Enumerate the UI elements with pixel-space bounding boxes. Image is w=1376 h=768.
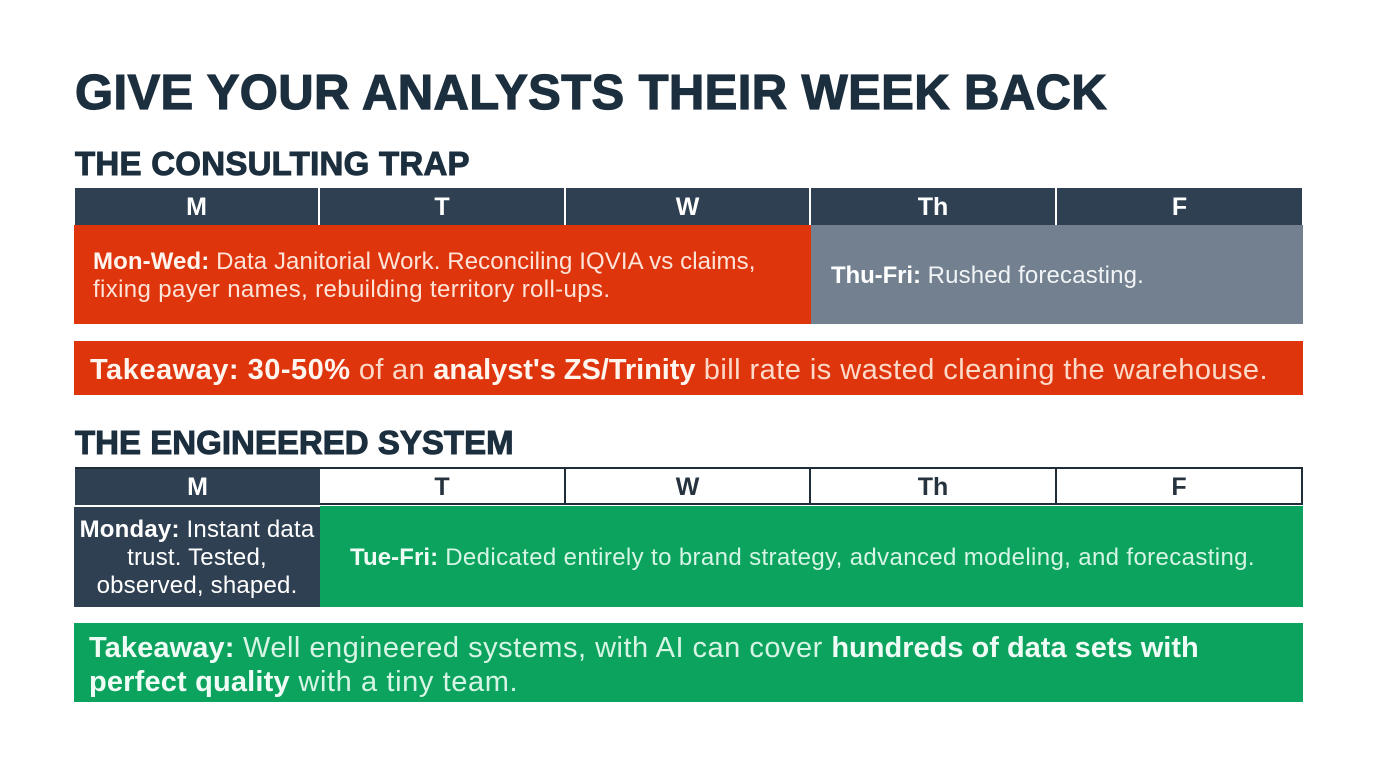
day: Monday active bbox=[75, 469, 320, 505]
text: Tue-Fri: Tue-Fri: Dedicated entirely to brand strategy, advanced modeling, and forecasting. bbox=[350, 544, 1255, 571]
day: Wednesday: W bbox=[676, 193, 699, 221]
day: Thursday bbox=[811, 188, 1057, 225]
panel: Monday instant data trust: trust. Tested, bbox=[127, 544, 267, 571]
day: Friday: F bbox=[1172, 193, 1187, 221]
panel: Thu-Fri rushed forecasting bbox=[811, 225, 1303, 324]
heading: the engineered system: THE ENGINEERED SYSTEM bbox=[75, 424, 514, 461]
day: Friday: F bbox=[1171, 473, 1187, 501]
panel: Tue-Fri dedicated bbox=[320, 506, 1303, 607]
panel: Mon-Wed data janitorial work bbox=[74, 225, 811, 324]
day header row: consulting trap bbox=[75, 188, 1302, 225]
day: Wednesday: W bbox=[676, 473, 699, 501]
panel: Monday instant data trust: observed, shaped. bbox=[97, 572, 297, 599]
panel: Monday instant data trust bbox=[74, 507, 320, 607]
text: engineered takeaway line 2: perfect quality with a tiny team. bbox=[89, 666, 518, 698]
day: Monday: M bbox=[186, 193, 207, 221]
text: Mon-Wed line 2: fixing payer names, rebuilding territory roll-ups. bbox=[93, 276, 610, 303]
text: Thu-Fri: Thu-Fri: Rushed forecasting. bbox=[831, 262, 1144, 289]
day: Wednesday bbox=[566, 469, 811, 505]
text: Mon-Wed line 1: Mon-Wed: Data Janitorial Work. Reconciling IQVIA vs claims, bbox=[93, 248, 756, 275]
day: Monday active: M bbox=[187, 473, 208, 501]
day: Thursday: Th bbox=[918, 193, 948, 221]
day: Tuesday bbox=[320, 469, 566, 505]
day header row: engineered system bbox=[75, 467, 1303, 505]
day: Thursday: Th bbox=[918, 473, 948, 501]
panel: Monday instant data trust: Monday: Instant data bbox=[80, 516, 314, 543]
day: Tuesday bbox=[320, 188, 566, 225]
heading: the consulting trap: THE CONSULTING TRAP bbox=[75, 145, 470, 182]
day: Wednesday bbox=[566, 188, 811, 225]
day: Tuesday: T bbox=[434, 193, 450, 221]
callout: engineered takeaway bbox=[74, 623, 1303, 702]
text: engineered takeaway line 1: Takeaway: Well engineered systems, with AI can cover hundreds of data sets with bbox=[89, 632, 1199, 664]
callout: consulting takeaway bbox=[74, 341, 1303, 395]
text: consulting takeaway: Takeaway: 30-50% of an analyst's ZS/Trinity bill rate is wasted cleaning the warehouse. bbox=[90, 354, 1268, 386]
day: Tuesday: T bbox=[434, 473, 450, 501]
day: Monday bbox=[75, 188, 320, 225]
day: Thursday bbox=[811, 469, 1057, 505]
title: GIVE YOUR ANALYSTS THEIR WEEK BACK bbox=[75, 66, 1107, 120]
